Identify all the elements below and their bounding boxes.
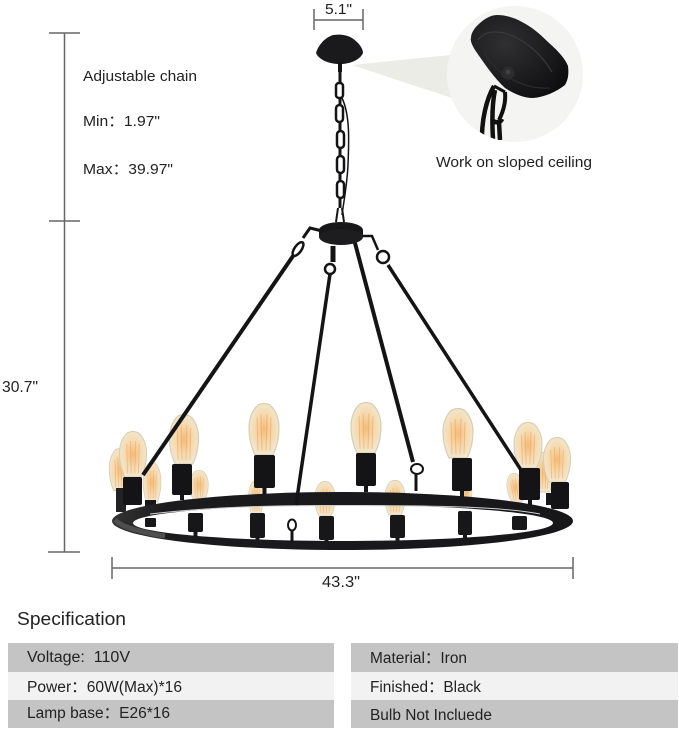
rear lower bulbs and sockets (145, 470, 527, 546)
dimension: ring width line (112, 557, 573, 579)
suspension arms and hub (143, 222, 521, 543)
panel: right specification table (351, 643, 678, 728)
panel: right specification table: Finished：Black (370, 679, 481, 696)
label: adjustable chain: Adjustable chain (83, 69, 197, 85)
label: total height: 30.7" (2, 379, 38, 396)
label: ring width: 43.3" (322, 574, 360, 591)
label: sloped ceiling: Work on sloped ceiling (436, 154, 592, 171)
panel: right specification table: Material：Iron (370, 650, 467, 667)
dimension: canopy width line (314, 9, 363, 30)
wagon wheel ring (112, 492, 573, 550)
chain and cable (336, 62, 349, 222)
upper bulbs and sockets (120, 403, 570, 509)
callout: sloped ceiling detail (352, 6, 583, 142)
heading: specification: Specification (17, 608, 126, 629)
label: maximum chain: Max：39.97" (83, 161, 173, 178)
back bulbs behind upper left and right (109, 448, 553, 512)
panel: right specification table: Bulb Not Incluede (370, 707, 492, 724)
panel: left specification table: Lamp base：E26*16 (27, 705, 170, 722)
label: canopy width: 5.1" (325, 1, 352, 18)
panel: left specification table: Power：60W(Max)*16 (27, 679, 182, 696)
label: minimum chain: Min：1.97" (83, 113, 160, 130)
panel: left specification table (8, 643, 334, 728)
icon: ceiling canopy (316, 35, 363, 64)
panel: left specification table: Voltage: 110V (27, 649, 131, 666)
dimension: chain height and total height line (48, 33, 80, 552)
